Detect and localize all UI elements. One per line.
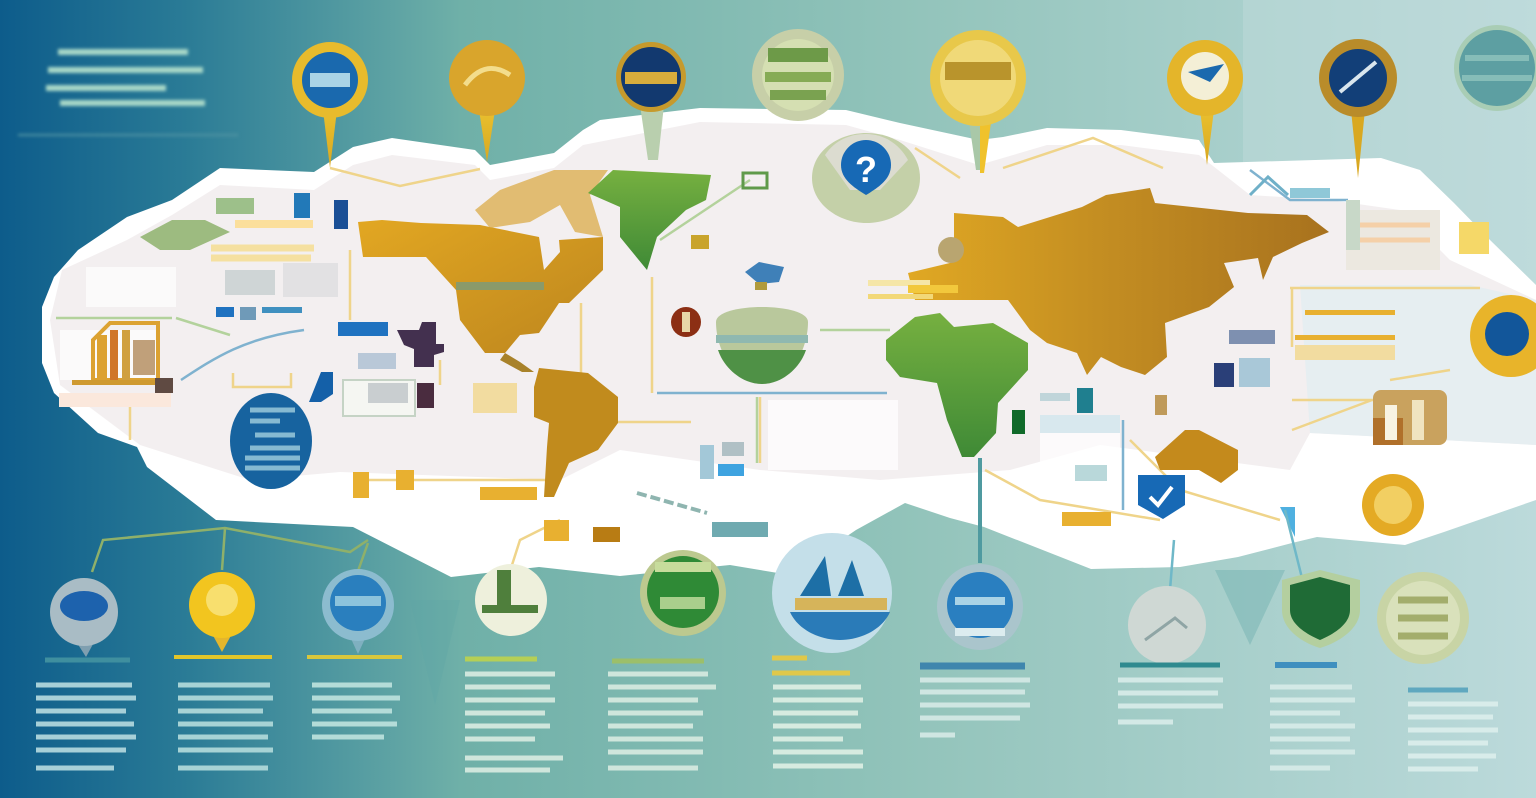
header text block <box>18 52 238 135</box>
North America <box>358 220 603 353</box>
top pins <box>292 25 1536 178</box>
left temple icon <box>72 323 173 393</box>
icon 2 <box>189 572 255 652</box>
Central America <box>500 353 534 372</box>
center globe <box>716 307 808 384</box>
pin 3 <box>616 42 686 160</box>
column 10 <box>1408 690 1498 769</box>
column 4 <box>465 659 563 770</box>
Europe yellow details <box>868 237 964 299</box>
teal band over North America <box>456 282 544 290</box>
left info boxes <box>59 193 517 416</box>
question mark pin: ? <box>855 149 877 190</box>
question mark pin <box>812 133 920 223</box>
Australia <box>1155 430 1238 483</box>
South America <box>534 368 618 497</box>
bottom text columns <box>36 657 1498 770</box>
Arctic islands <box>475 170 608 237</box>
pin 5 <box>930 30 1026 173</box>
pin 6 <box>1167 40 1243 165</box>
column 1 <box>36 660 136 768</box>
gold coin <box>1362 474 1424 536</box>
small gold markers lower map <box>353 310 1395 542</box>
icon 7 <box>937 564 1023 650</box>
pin 4 <box>752 29 844 121</box>
pin 7 <box>1319 39 1397 178</box>
panel: tinted map interior <box>50 122 1536 480</box>
building icon right <box>1373 390 1447 445</box>
left blue circle <box>230 393 312 489</box>
right map details <box>700 177 1489 537</box>
Greenland <box>588 170 711 270</box>
network lines <box>56 138 1480 565</box>
right edge pin <box>1470 295 1536 377</box>
icon 10 <box>1377 572 1469 664</box>
decorative translucent triangles <box>410 570 1285 705</box>
small gold and green map icons <box>691 173 767 249</box>
Eurasia <box>908 188 1329 375</box>
pin 2 <box>449 40 525 162</box>
small marker <box>671 307 701 337</box>
icon 6 <box>772 533 892 653</box>
panel: right bluish tint <box>1300 285 1536 445</box>
right background panel <box>1243 0 1536 300</box>
pin 1 <box>292 42 368 168</box>
column 7 <box>920 666 1030 735</box>
pin 8 <box>1454 25 1536 111</box>
small blue map icon <box>745 262 784 290</box>
icon 5 <box>640 550 726 636</box>
icon 4 <box>475 564 547 636</box>
column 9 <box>1270 665 1355 768</box>
dark icon cluster <box>309 322 444 408</box>
column 8 <box>1118 665 1223 722</box>
Africa <box>886 313 1028 457</box>
column 5 <box>608 661 716 768</box>
icon 8 <box>1128 586 1206 664</box>
column 3 <box>307 657 402 737</box>
column 2 <box>174 657 273 768</box>
panel: white cloud map area <box>42 108 1536 577</box>
icon 3 <box>322 569 394 654</box>
map: continents <box>358 170 1329 497</box>
connectors to bottom icons <box>92 458 1303 590</box>
column 6 <box>772 658 863 766</box>
faint boxes on map <box>60 267 1120 495</box>
icon 9 <box>1282 570 1360 648</box>
blue badge <box>1138 475 1185 519</box>
icon 1 <box>50 578 118 657</box>
bottom icons <box>50 533 1469 664</box>
